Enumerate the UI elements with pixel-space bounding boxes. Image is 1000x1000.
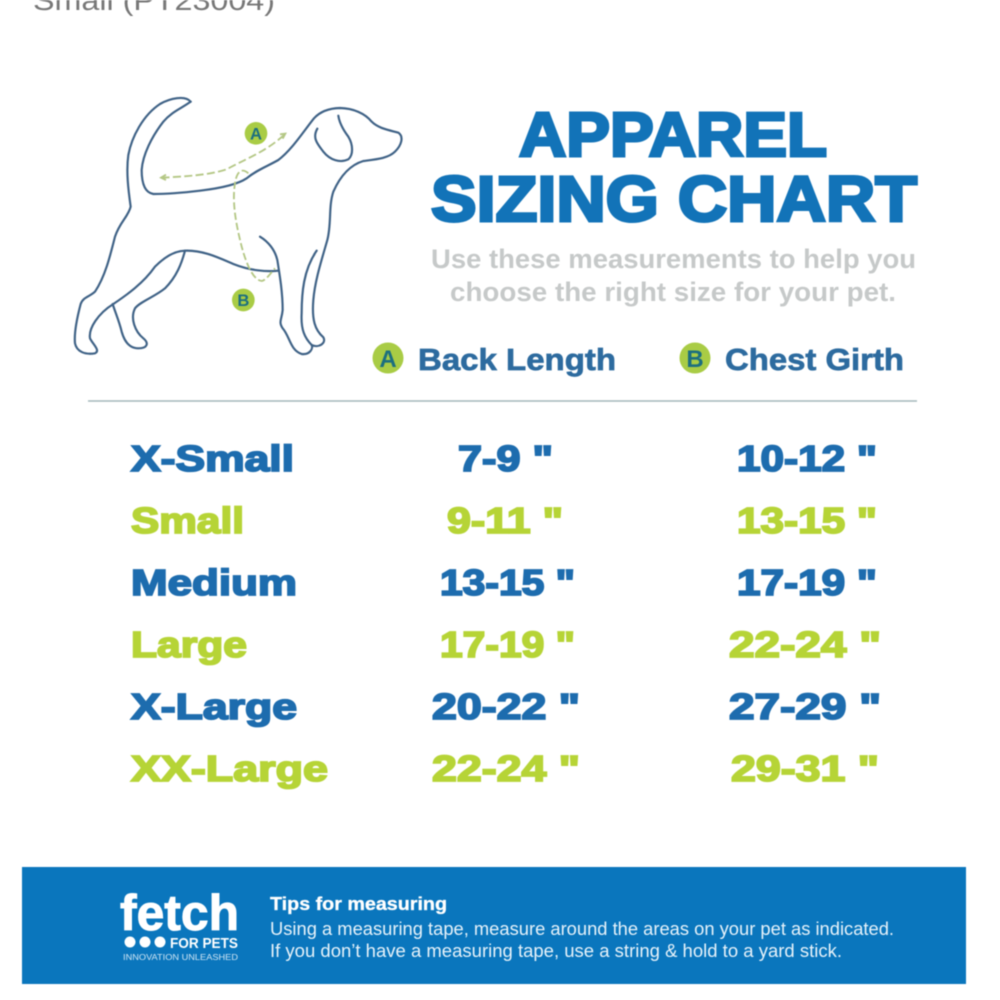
- footer banner: [22, 867, 966, 984]
- legend: back length: Back Length: [418, 342, 616, 377]
- row: Medium: 13-15 ": [440, 562, 575, 603]
- legend: back length: A: [379, 346, 397, 373]
- row: X-Small: 10-12 ": [737, 438, 877, 479]
- legend: chest girth: Chest Girth: [725, 342, 904, 377]
- row: Large: 22-24 ": [729, 624, 881, 665]
- dog body outline: [75, 98, 402, 354]
- title: APPAREL: [519, 101, 827, 170]
- tips for measuring: Tips for measuring: [270, 894, 447, 914]
- row: Medium: [131, 562, 877, 603]
- marker A on dog: [245, 122, 267, 145]
- row: X-Small: 7-9 ": [458, 438, 553, 479]
- fetch logo: fetch: [120, 885, 239, 941]
- row: XX-Large: XX-Large: [131, 748, 328, 789]
- chest girth dashed line: [234, 171, 275, 281]
- marker B on dog: B: [237, 291, 249, 310]
- subtitle: [431, 244, 916, 307]
- subtitle: choose the right size for your pet.: [450, 277, 896, 307]
- row: XX-Large: [131, 748, 879, 789]
- illustration: dog outline with measurements: [75, 98, 402, 354]
- row: X-Large: 27-29 ": [729, 686, 881, 727]
- row: Small: 13-15 ": [737, 500, 877, 541]
- row: X-Large: X-Large: [131, 686, 297, 727]
- tips for measuring: If you don’t have a measuring tape, use a string & hold to a yard stick.: [270, 941, 842, 961]
- row: Large: 17-19 ": [440, 624, 575, 665]
- row: Small: 9-11 ": [447, 500, 563, 541]
- tips for measuring: [270, 894, 894, 961]
- title: [431, 101, 917, 235]
- fetch logo: INNOVATION UNLEASHED: [123, 953, 238, 962]
- fetch logo: FOR PETS: [170, 935, 238, 952]
- row: Large: [131, 624, 881, 665]
- back length dashed arrow: [161, 134, 285, 180]
- size table: [131, 438, 881, 789]
- legend: chest girth: B: [686, 346, 704, 373]
- row: X-Large: [131, 686, 881, 727]
- row: X-Large: 20-22 ": [432, 686, 580, 727]
- row: Large: Large: [131, 624, 247, 665]
- row: X-Small: X-Small: [131, 438, 294, 479]
- row: Medium: Medium: [131, 562, 297, 603]
- subtitle: Use these measurements to help you: [431, 244, 916, 274]
- marker A on dog: A: [250, 124, 262, 143]
- marker B on dog: [232, 289, 255, 311]
- title: SIZING CHART: [431, 163, 917, 235]
- row: Medium: 17-19 ": [737, 562, 877, 603]
- row: Small: Small: [131, 500, 244, 541]
- tips for measuring: Using a measuring tape, measure around the areas on your pet as indicated.: [270, 919, 894, 939]
- row: X-Small: [131, 438, 877, 479]
- row: Small: [131, 500, 877, 541]
- row: XX-Large: 29-31 ": [731, 748, 879, 789]
- row: XX-Large: 22-24 ": [432, 748, 580, 789]
